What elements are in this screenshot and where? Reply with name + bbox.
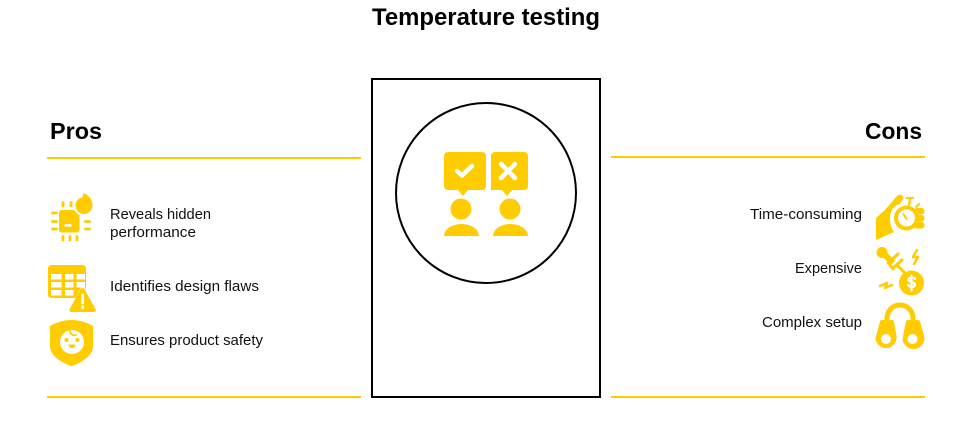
icon: hand with stopwatch bbox=[876, 195, 924, 240]
text: reveals hidden performance: Reveals hidden bbox=[110, 207, 211, 223]
title: Temperature testing bbox=[372, 4, 600, 31]
panel: cons bbox=[611, 118, 925, 397]
text: complex setup: Complex setup bbox=[762, 315, 862, 331]
icon: shield with baby face bbox=[50, 320, 93, 366]
text: ensures product safety: Ensures product safety bbox=[110, 333, 264, 349]
text: expensive: Expensive bbox=[795, 261, 862, 277]
text: identifies design flaws: Identifies design flaws bbox=[110, 279, 259, 295]
icon: broken tool and dollar coin bbox=[876, 247, 924, 296]
pros heading: Pros bbox=[50, 118, 102, 144]
panel: pros: performance bbox=[110, 225, 196, 241]
panel: pros bbox=[47, 118, 361, 397]
icon: person approving bbox=[444, 152, 486, 236]
icon: chip with flame bbox=[52, 193, 95, 240]
icon: handcuffs bbox=[876, 305, 925, 349]
icon: table with warning bbox=[48, 265, 99, 314]
cons heading: Cons bbox=[865, 118, 922, 144]
center panel frame bbox=[372, 79, 600, 397]
icon: person rejecting bbox=[491, 152, 528, 236]
text: time-consuming: Time-consuming bbox=[750, 207, 862, 223]
center circle with people icon bbox=[396, 103, 576, 283]
